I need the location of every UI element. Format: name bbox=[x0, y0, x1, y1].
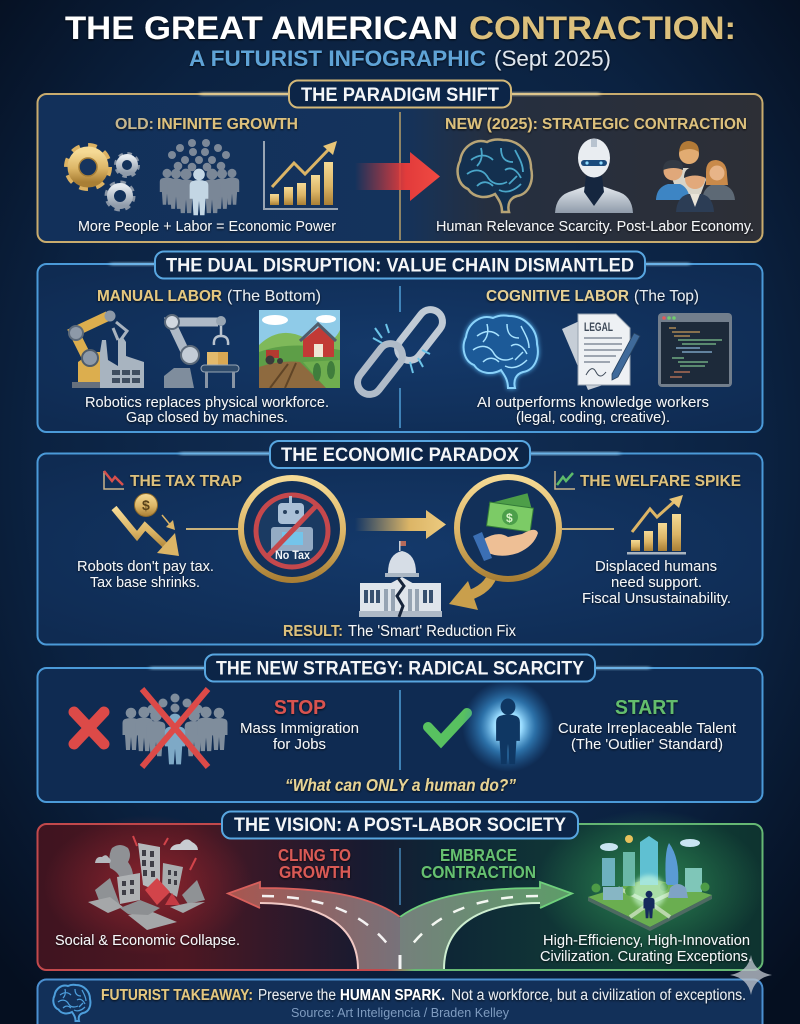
panel: the new strategy bbox=[38, 654, 762, 802]
heading pill: the paradigm shift: THE PARADIGM SHIFT bbox=[301, 85, 499, 106]
result line: The 'Smart' Reduction Fix bbox=[348, 623, 516, 640]
caption: human relevance scarcity: Human Relevance Scarcity. Post-Labor Economy. bbox=[436, 219, 754, 235]
panel: the dual disruption bbox=[38, 252, 762, 432]
caption: robotics replaces physical workforce: Gap closed by machines. bbox=[126, 410, 288, 426]
caption: robots do not pay tax bbox=[77, 559, 214, 591]
icon: sparkle watermark bbox=[730, 955, 772, 995]
panel: the vision bbox=[38, 810, 765, 970]
icon: money over open hand in gold ring with tail bbox=[449, 477, 559, 610]
takeaway text: FUTURIST TAKEAWAY: bbox=[101, 987, 253, 1004]
caption: social and economic collapse: Social & Economic Collapse. bbox=[55, 933, 240, 949]
label: embrace contraction: CONTRACTION bbox=[421, 862, 536, 882]
icon: silver robot arm with conveyor bbox=[164, 315, 239, 388]
icon: falling coin and zigzag arrow: $ bbox=[142, 497, 150, 513]
stop block: Mass Immigration bbox=[240, 721, 359, 737]
icon: welfare rising chart bbox=[627, 495, 686, 554]
start block bbox=[558, 697, 736, 753]
start block: (The 'Outlier' Standard) bbox=[571, 737, 723, 753]
title bbox=[65, 10, 736, 46]
panel: futurist takeaway bbox=[38, 980, 762, 1024]
connector line bbox=[562, 528, 614, 530]
result line bbox=[283, 623, 516, 640]
caption: robotics replaces physical workforce bbox=[85, 395, 329, 426]
caption: high-efficiency civilization bbox=[540, 933, 752, 965]
icon: yellow robot arm with factory bbox=[69, 310, 144, 388]
icon: robot bbox=[555, 138, 633, 213]
icon: code editor window bbox=[658, 313, 732, 387]
arrow: tax trap to welfare spike bbox=[355, 510, 446, 539]
caption: ai outperforms knowledge workers: AI outperforms knowledge workers bbox=[477, 395, 709, 411]
icon: glowing blue brain bbox=[464, 316, 538, 388]
icon: crowd crossed out bbox=[122, 689, 228, 767]
stop block: for Jobs bbox=[273, 737, 326, 753]
heading: manual labor: (The Bottom) bbox=[227, 288, 321, 305]
icon: outline brain bbox=[53, 985, 90, 1021]
heading: the tax trap: THE TAX TRAP bbox=[130, 473, 242, 490]
heading: manual labor bbox=[97, 288, 321, 305]
icon: falling coin and zigzag arrow bbox=[114, 494, 179, 556]
title: THE GREAT AMERICAN bbox=[65, 10, 458, 46]
stop block bbox=[240, 697, 359, 753]
heading: cognitive labor: COGNITIVE LABOR bbox=[486, 288, 629, 305]
road: left fork to collapse bbox=[228, 882, 400, 969]
takeaway text: Preserve the bbox=[258, 987, 336, 1004]
label: embrace contraction bbox=[421, 845, 536, 882]
icon: no tax robot in gold ring bbox=[241, 478, 343, 580]
heading: new strategic contraction: STRATEGIC CONTRACTION bbox=[542, 116, 747, 133]
heading: old infinite growth: OLD: bbox=[115, 116, 154, 133]
title: CONTRACTION: bbox=[469, 10, 736, 46]
heading: cognitive labor: (The Top) bbox=[634, 288, 699, 305]
heading: the welfare spike: THE WELFARE SPIKE bbox=[580, 473, 741, 490]
caption: high-efficiency civilization: High-Efficiency, High-Innovation bbox=[543, 933, 750, 949]
heading: new strategic contraction: NEW (2025): bbox=[445, 116, 538, 133]
label: cling to growth: GROWTH bbox=[279, 862, 351, 882]
icon: legal document with pen: LEGAL bbox=[584, 320, 613, 334]
result line: RESULT: bbox=[283, 623, 343, 640]
subtitle: A FUTURIST INFOGRAPHIC bbox=[189, 46, 486, 71]
icon: crowd of people with one highlighted bbox=[160, 139, 239, 215]
icon: efficient future city bbox=[588, 835, 712, 931]
caption: high-efficiency civilization: Civilization. Curating Exceptions. bbox=[540, 949, 752, 965]
icon: green check bbox=[428, 713, 467, 741]
connector line bbox=[186, 528, 240, 530]
takeaway text: HUMAN SPARK. bbox=[340, 987, 445, 1004]
stop block: STOP bbox=[274, 697, 326, 719]
caption: displaced humans need support: need support. bbox=[611, 575, 702, 591]
caption: displaced humans need support: Fiscal Unsustainability. bbox=[582, 591, 731, 607]
takeaway text: Not a workforce, but a civilization of exceptions. bbox=[451, 987, 746, 1004]
arrow: old to new bbox=[355, 152, 440, 201]
icon: glowing outlier person bbox=[462, 680, 554, 772]
source line: Source: Art Inteligencia / Braden Kelley bbox=[291, 1006, 510, 1020]
icon: no tax robot in gold ring: No Tax bbox=[275, 548, 310, 562]
heading pill: the vision: THE VISION: A POST-LABOR SOCIETY bbox=[234, 815, 566, 836]
panel: the paradigm shift bbox=[38, 80, 762, 242]
quote: “What can ONLY a human do?” bbox=[285, 775, 516, 795]
icon: cracked capitol building bbox=[359, 541, 442, 617]
chart: rising bars and arrow bbox=[264, 141, 338, 209]
caption: robotics replaces physical workforce: Robotics replaces physical workforce. bbox=[85, 395, 329, 411]
label: cling to growth: CLING TO bbox=[278, 845, 351, 865]
label: cling to growth bbox=[278, 845, 351, 882]
heading: old infinite growth: INFINITE GROWTH bbox=[157, 116, 298, 133]
icon: circuit brain bbox=[458, 140, 532, 212]
icon: money over open hand in gold ring with tail: $ bbox=[506, 511, 513, 525]
icon: gears bbox=[68, 147, 138, 208]
caption: more people plus labor: More People + Labor = Economic Power bbox=[78, 219, 336, 235]
caption: robots do not pay tax: Robots don't pay tax. bbox=[77, 559, 214, 575]
icon: collapsed city bbox=[88, 836, 205, 930]
caption: robots do not pay tax: Tax base shrinks. bbox=[90, 575, 200, 591]
caption: ai outperforms knowledge workers bbox=[477, 395, 709, 426]
heading pill: new strategy: THE NEW STRATEGY: RADICAL SCARCITY bbox=[216, 658, 584, 680]
subtitle: (Sept 2025) bbox=[494, 46, 611, 71]
icon: legal document with pen bbox=[562, 314, 640, 390]
takeaway text bbox=[101, 987, 746, 1004]
panel: the economic paradox bbox=[38, 441, 762, 644]
heading: manual labor: MANUAL LABOR bbox=[97, 288, 222, 305]
caption: displaced humans need support: Displaced humans bbox=[595, 559, 717, 575]
icon: broken chain link bbox=[353, 305, 447, 399]
caption: ai outperforms knowledge workers: (legal, coding, creative). bbox=[516, 410, 670, 426]
icon: red x bbox=[74, 712, 104, 744]
label: embrace contraction: EMBRACE bbox=[440, 845, 517, 865]
heading pill: dual disruption: THE DUAL DISRUPTION: VALUE CHAIN DISMANTLED bbox=[166, 256, 634, 276]
heading: new strategic contraction bbox=[445, 116, 747, 133]
icon: farm scene bbox=[259, 310, 340, 388]
start block: START bbox=[615, 697, 678, 719]
icon: group of people bbox=[656, 141, 735, 212]
start block: Curate Irreplaceable Talent bbox=[558, 721, 736, 737]
subtitle bbox=[189, 46, 611, 71]
caption: displaced humans need support bbox=[582, 559, 731, 607]
heading pill: economic paradox: THE ECONOMIC PARADOX bbox=[281, 445, 519, 466]
road: right fork to post-labor society bbox=[400, 882, 572, 969]
